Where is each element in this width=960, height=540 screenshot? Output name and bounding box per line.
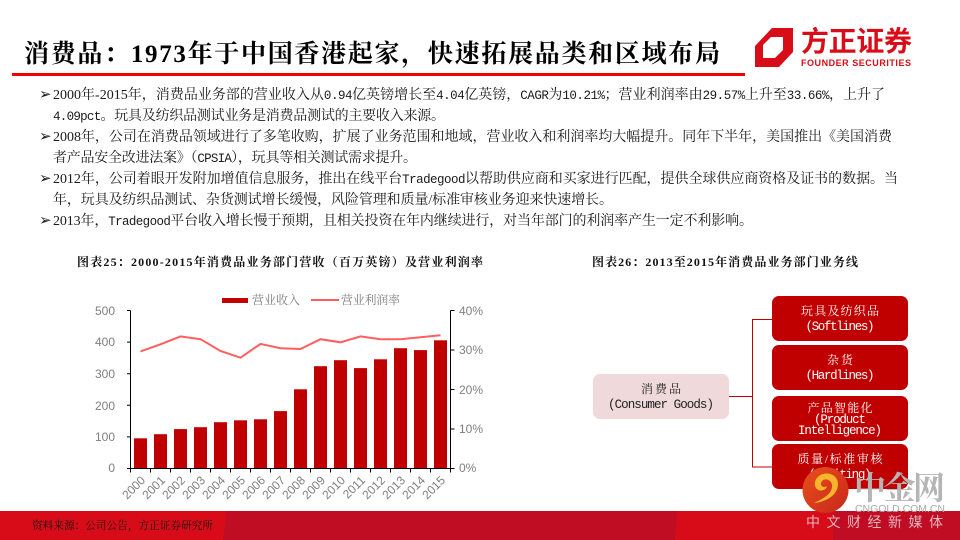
year labels: 2004 [199, 473, 228, 502]
footer band [0, 511, 960, 540]
year labels: 2003 [179, 473, 208, 502]
year labels: 2013 [379, 473, 408, 502]
right axis labels: 40% [459, 304, 483, 318]
left axis labels [95, 304, 115, 475]
box: softlines: (Softlines) [806, 320, 874, 334]
margin line [140, 335, 440, 358]
year labels: 2005 [219, 473, 248, 502]
bullet 3: 年，玩具及纺织品测试、杂货测试增长缓慢，风险管理和质量/标准审核业务迎来快速增长。 [53, 191, 613, 208]
text block: bullet points [39, 85, 898, 229]
year labels: 2012 [359, 473, 388, 502]
bullet 1 [39, 85, 885, 124]
year labels: 2014 [399, 473, 428, 502]
right axis labels: 10% [459, 422, 483, 436]
bullet 2: 者产品安全改进法案》（CPSIA），玩具等相关测试需求提升。 [53, 149, 417, 166]
bullet 4: ➢ [39, 211, 52, 229]
left axis labels: 500 [95, 304, 115, 318]
legend [222, 292, 400, 307]
bar chart: revenue and operating margin [95, 292, 483, 502]
bullet 1: ➢ [39, 85, 52, 103]
box: product intelligence [772, 396, 908, 441]
bullet 3: 2012年，公司着眼开发附加增值信息服务，推出在线平台Tradegood以帮助供应商和买家进行匹配，提供全球供应商资格及证书的数据。当 [53, 170, 898, 187]
connectors [729, 320, 772, 467]
legend: 营业收入 [252, 292, 300, 307]
box: hardlines: 杂货 [827, 352, 854, 367]
logo: Founder Securities: 方正证券 [801, 20, 912, 60]
wordmark: 中金网 [854, 463, 945, 509]
bullet 4: 2013年，Tradegood平台收入增长慢于预期，且相关投资在年内继续进行，对当年部门的利润率产生一定不利影响。 [53, 212, 753, 229]
year labels: 2008 [279, 473, 308, 502]
year labels: 2009 [299, 473, 328, 502]
box: auditing [772, 444, 908, 489]
year labels: 2011 [340, 473, 368, 501]
bullet 2 [39, 127, 893, 166]
tagline: 中文财经新媒体 [806, 512, 943, 532]
box: product intelligence: 产品智能化 [808, 400, 872, 415]
right axis labels: 20% [459, 383, 483, 397]
source note: 资料来源：公司公告，方正证券研究所 [32, 519, 213, 532]
bullet 2: 2008年，公司在消费品领域进行了多笔收购，扩展了业务范围和地域，营业收入和利润率均大幅提升。同年下半年，美国推出《美国消费 [53, 128, 893, 145]
bullet 1: 2000年-2015年，消费品业务部的营业收入从0.94亿英镑增长至4.04亿英镑，CAGR为10.21%；营业利润率由29.57%上升至33.66%，上升了 [53, 86, 885, 103]
bullet 3 [39, 169, 898, 208]
left axis labels: 0 [108, 461, 115, 475]
diagram: business lines [593, 296, 908, 489]
box: softlines [772, 296, 908, 341]
right axis labels: 0% [459, 461, 477, 475]
bullet 1: 4.09pct。玩具及纺织品测试业务是消费品测试的主要收入来源。 [53, 107, 445, 124]
logo: Founder Securities: FOUNDER SECURITIES [801, 58, 911, 68]
left axis labels: 100 [95, 430, 115, 444]
box: hardlines: (Hardlines) [806, 369, 874, 383]
legend: 营业利润率 [341, 292, 400, 307]
watermark: cngold [802, 463, 945, 532]
box: product intelligence: Intelligence) [798, 424, 882, 438]
title underline [12, 73, 745, 76]
box: softlines: 玩具及纺织品 [801, 304, 879, 318]
heading: chart 25: 图表25：2000-2015年消费品业务部门营收（百万英镑）及营业利润率 [77, 254, 484, 269]
year labels [119, 473, 448, 502]
year labels: 2000 [119, 473, 148, 502]
logo: Founder Securities [755, 20, 912, 68]
year labels: 2010 [319, 473, 348, 502]
title: 消费品：1973年于中国香港起家，快速拓展品类和区域布局 [24, 39, 720, 69]
year labels: 2001 [139, 473, 168, 502]
axes [127, 310, 454, 472]
bullet 2: ➢ [39, 127, 52, 145]
left axis labels: 300 [95, 367, 115, 381]
bars [134, 340, 447, 468]
box: auditing: 质量/标准审核 [798, 451, 883, 466]
bullet 3: ➢ [39, 169, 52, 187]
left axis labels: 200 [95, 399, 115, 413]
icon: swirl [802, 467, 848, 513]
year labels: 2002 [159, 473, 188, 502]
right axis labels [459, 304, 483, 475]
left axis labels: 400 [95, 335, 115, 349]
box: consumer goods: (Consumer Goods) [608, 398, 714, 412]
box: auditing: (Auditing) [808, 468, 872, 482]
box: hardlines [772, 345, 908, 390]
right axis labels: 30% [459, 343, 483, 357]
url: CNGOLD.COM.CN [855, 503, 945, 515]
year labels: 2007 [259, 473, 288, 502]
year labels: 2015 [419, 473, 448, 502]
year labels: 2006 [239, 473, 268, 502]
box: product intelligence: (Product [814, 413, 866, 427]
box: consumer goods: 消费品 [641, 381, 681, 396]
box: consumer goods [593, 374, 729, 419]
heading: chart 26: 图表26：2013至2015年消费品业务部门业务线 [592, 254, 858, 269]
